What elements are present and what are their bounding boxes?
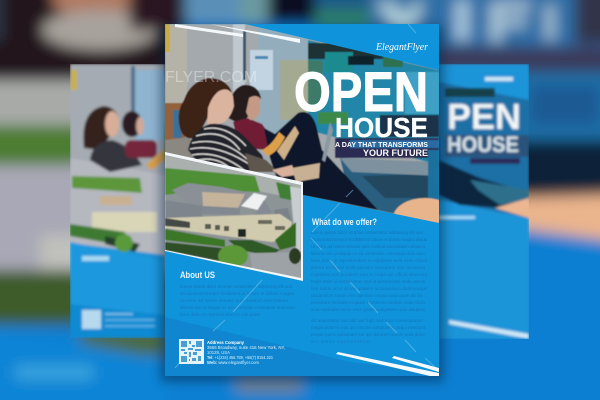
right background flyer: HOUSE (447, 132, 519, 157)
title: A DAY THAT TRANSFORMS (335, 140, 428, 149)
section: what do we offer (311, 217, 428, 344)
body text: offer: irure dolor in reprehenderit in voluptate velit esse cillum (311, 258, 427, 263)
body text: about: do eiusmod tempor incididunt ut labore et dolore magna (180, 291, 295, 296)
body text: offer: Sit aspernatur aut odit aut fugit sed quia consequuntur (311, 318, 424, 323)
body text: offer: sunt explicabo nemo enim ipsam voluptatem quia voluptas (311, 307, 426, 312)
lounge photo with two students (165, 24, 439, 223)
body text: offer: mollit anim id est laborum sed ut perspiciatis unde omnis (311, 279, 426, 284)
body text: offer: dolore eu fugiat nulla pariatur excepteur sint occaecat (311, 265, 426, 270)
QR code (179, 339, 204, 364)
contact details (207, 340, 285, 365)
window scene (308, 40, 439, 165)
title: OPEN (294, 60, 428, 123)
left background flyer (70, 64, 165, 338)
body text: about: irure dolor in reprehenderit in voluptate (180, 312, 261, 317)
right background flyer: PEN (447, 96, 521, 137)
body text: offer: cupidatat non proident sunt in culpa qui officia deserunt (311, 272, 428, 277)
faint watermark: FLYER.COM (165, 69, 257, 86)
body text: offer (311, 230, 428, 344)
student left: face and neck (207, 89, 234, 128)
title: HOUSE (335, 112, 428, 143)
striped sweater (188, 124, 268, 172)
contact details: Address Company (207, 340, 245, 345)
heading: what do we offer: What do we offer? (312, 217, 377, 227)
body text: offer: neque porro quisquam est qui dolorem ipsum quia dolor (311, 332, 426, 337)
student right: jeans (264, 112, 378, 210)
aerial campus photo (165, 150, 303, 281)
flyer shadow (160, 26, 444, 382)
body text: about: Ut enim ad minim veniam quis nostrud exercitation (180, 298, 289, 303)
body text: offer: do eiusmod tempor incididunt ut labore et dolore magna aliqua (311, 237, 428, 242)
contact details: 10128, USA (207, 350, 230, 355)
main flyer (160, 24, 457, 382)
body text: offer: laudantium totam rem aperiam eaque ipsa quae ab illo (311, 293, 424, 298)
top white stripes (175, 24, 300, 43)
body text: about: laboris nisi ut aliquip ex ea commodo consequat duis aute (180, 305, 296, 310)
table (393, 197, 439, 223)
title: YOUR FUTURE (363, 148, 428, 158)
arm (262, 132, 285, 156)
body text: offer: Ut enim ad minim veniam quis nostrud exercitation ullamco (311, 244, 426, 249)
book (277, 126, 299, 160)
lap with hand and laptop (245, 153, 278, 172)
contact details: 3566 Broadway, suite 416 New York, NY, (207, 345, 285, 350)
logo: ElegantFlyer (375, 42, 428, 53)
student right: top and hair (228, 85, 261, 124)
flyer blue panel (165, 24, 439, 376)
contact details: Web: www.elegantflyer.com (207, 360, 259, 365)
contact details: Tel: +1(234) 456.789, +56(7) 8154.321 (207, 355, 273, 360)
student left: hair (179, 78, 232, 138)
section: about us (180, 270, 296, 317)
body text: about (180, 284, 296, 317)
right background flyer (439, 64, 529, 339)
sofa (165, 136, 196, 158)
body text: offer: sit amet consectetur (311, 339, 372, 344)
watermark diagonals (175, 24, 436, 368)
darker footer band (165, 317, 439, 376)
body text: offer: iste natus error sit voluptatem accusantium doloremque (311, 286, 428, 291)
heading: about us: About US (180, 270, 215, 280)
bottom white stripes (336, 352, 439, 376)
body text: offer: Lorem ipsum dolor sit amet consectetur adipiscing elit sed (311, 230, 424, 235)
body text: about: Lorem ipsum dolor sit amet consectetur adipiscing elit sed (180, 284, 293, 289)
body text: offer: magni dolores eos qui ratione voluptatem sequi nesciunt (311, 325, 426, 330)
body text: offer: inventore veritatis et quasi architecto beatae vitae dicta (311, 300, 426, 305)
body text: offer: laboris nisi ut aliquip ex ea commodo consequat duis aute (311, 251, 426, 256)
title (294, 60, 428, 158)
